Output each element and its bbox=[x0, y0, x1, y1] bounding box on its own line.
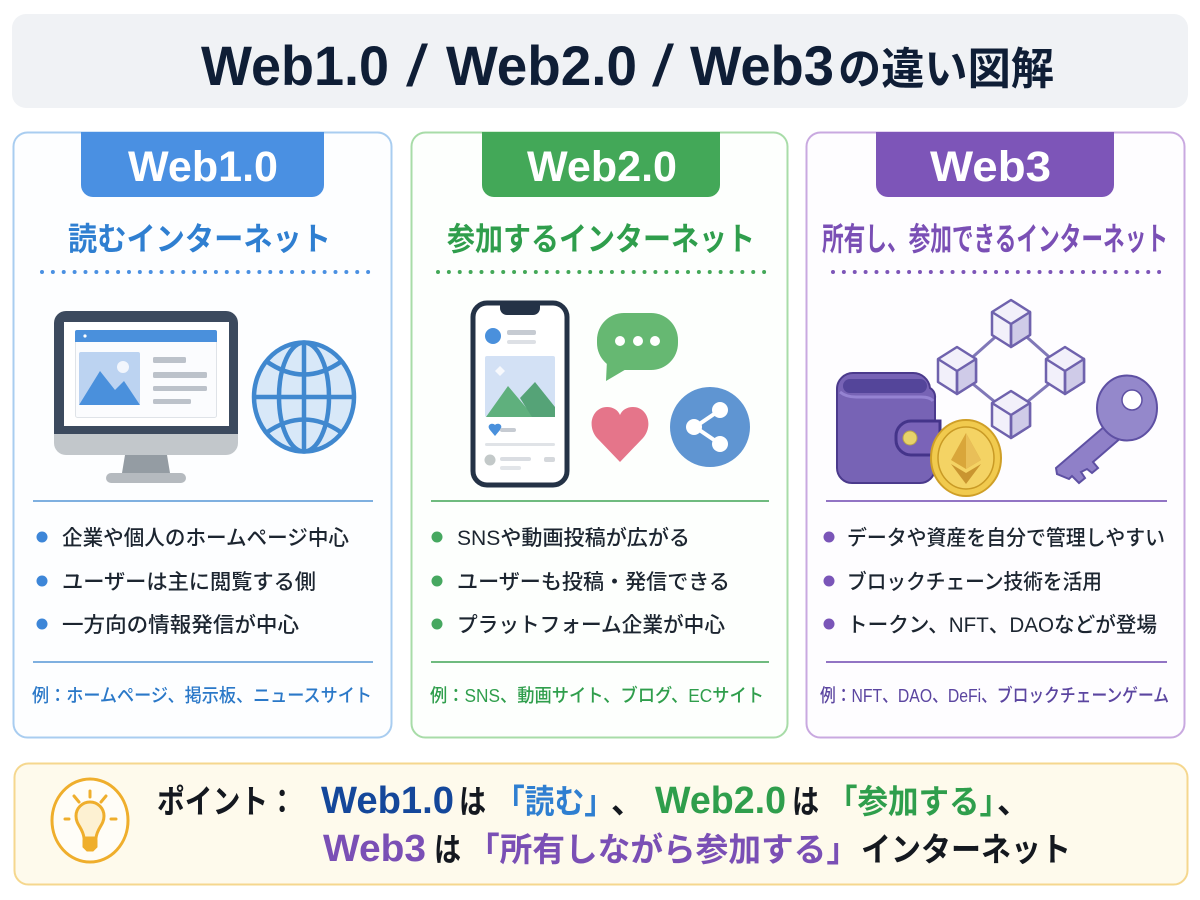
icon: smartphone bbox=[473, 303, 567, 485]
tab: Web3: Web3 bbox=[930, 143, 1051, 191]
heading: 参加するインターネット: 参加するインターネット bbox=[447, 221, 755, 257]
title banner bbox=[12, 14, 1188, 108]
title banner: Web2.0 bbox=[446, 34, 637, 97]
panel: Web3 bbox=[806, 132, 1184, 738]
bullet list: Web2.0: ユーザーも投稿・発信できる bbox=[457, 571, 730, 594]
summary line 2: Web3 bbox=[323, 828, 426, 870]
summary line 1: 「参加する」 bbox=[827, 783, 1010, 820]
icon: light bulb bbox=[52, 779, 128, 862]
heading: 読むインターネット: 読むインターネット bbox=[68, 221, 331, 257]
tab: Web1.0 bbox=[81, 132, 324, 197]
summary line 2: は bbox=[434, 831, 461, 868]
summary line 1: 、 bbox=[997, 783, 1030, 820]
summary line 2: 「所有しながら参加する」 bbox=[467, 831, 859, 868]
bullet list: Web1.0: ユーザーは主に閲覧する側 bbox=[62, 571, 316, 594]
bullet list: Web1.0 bbox=[36, 527, 349, 637]
summary line 1: 「読む」 bbox=[495, 783, 614, 820]
panel: Web1.0 bbox=[14, 132, 392, 738]
bullet list: Web3: データや資産を自分で管理しやすい bbox=[847, 526, 1165, 550]
title banner: の違い図解 bbox=[838, 45, 1054, 94]
tab: Web2.0: Web2.0 bbox=[527, 143, 677, 191]
bullet list: Web2.0: プラットフォーム企業が中心 bbox=[457, 614, 725, 637]
bullet list: Web2.0 bbox=[432, 527, 730, 637]
bullet list: Web3 bbox=[824, 526, 1165, 637]
icon: wallet bbox=[837, 373, 940, 483]
tab: Web2.0 bbox=[482, 132, 720, 197]
tab: Web3 bbox=[876, 132, 1114, 197]
bullet list: Web1.0: 企業や個人のホームページ中心 bbox=[62, 527, 349, 550]
summary line 2: インターネット bbox=[861, 831, 1071, 868]
title banner: / bbox=[652, 34, 675, 99]
icon: key bbox=[1056, 376, 1157, 483]
bullet list: Web3: トークン、NFT、DAOなどが登場 bbox=[847, 614, 1157, 637]
icon: ethereum coin bbox=[931, 420, 1001, 496]
example: Web2.0: 例：SNS、動画サイト、ブログ、ECサイト bbox=[430, 685, 764, 706]
point label: ポイント： bbox=[157, 783, 296, 820]
icon: desktop monitor bbox=[54, 311, 238, 483]
bullet list: Web2.0: SNSや動画投稿が広がる bbox=[457, 527, 690, 550]
example: Web1.0: 例：ホームページ、掲示板、ニュースサイト bbox=[32, 685, 372, 706]
bullet list: Web1.0: 一方向の情報発信が中心 bbox=[62, 614, 299, 637]
title banner: / bbox=[406, 34, 429, 99]
summary line 1: は bbox=[792, 783, 819, 820]
icon: globe bbox=[254, 342, 354, 452]
summary line 1: 、 bbox=[611, 783, 644, 820]
panel: Web2.0 bbox=[412, 132, 788, 738]
summary line 1: Web2.0 bbox=[655, 780, 786, 822]
summary line 1 bbox=[321, 780, 1030, 822]
tab: Web1.0: Web1.0 bbox=[128, 143, 278, 191]
title banner: Web1.0 bbox=[201, 34, 389, 97]
icon: share bbox=[670, 387, 750, 467]
callout: point bbox=[14, 764, 1188, 884]
title banner: Web3 bbox=[690, 34, 834, 97]
summary line 1: Web1.0 bbox=[321, 780, 454, 822]
icon: blockchain network bbox=[938, 300, 1084, 438]
bullet list: Web3: ブロックチェーン技術を活用 bbox=[847, 570, 1102, 594]
icon: chat bubble bbox=[597, 313, 678, 381]
icon: heart bbox=[592, 407, 648, 462]
summary line 2 bbox=[323, 828, 1071, 870]
summary line 1: は bbox=[459, 783, 486, 820]
